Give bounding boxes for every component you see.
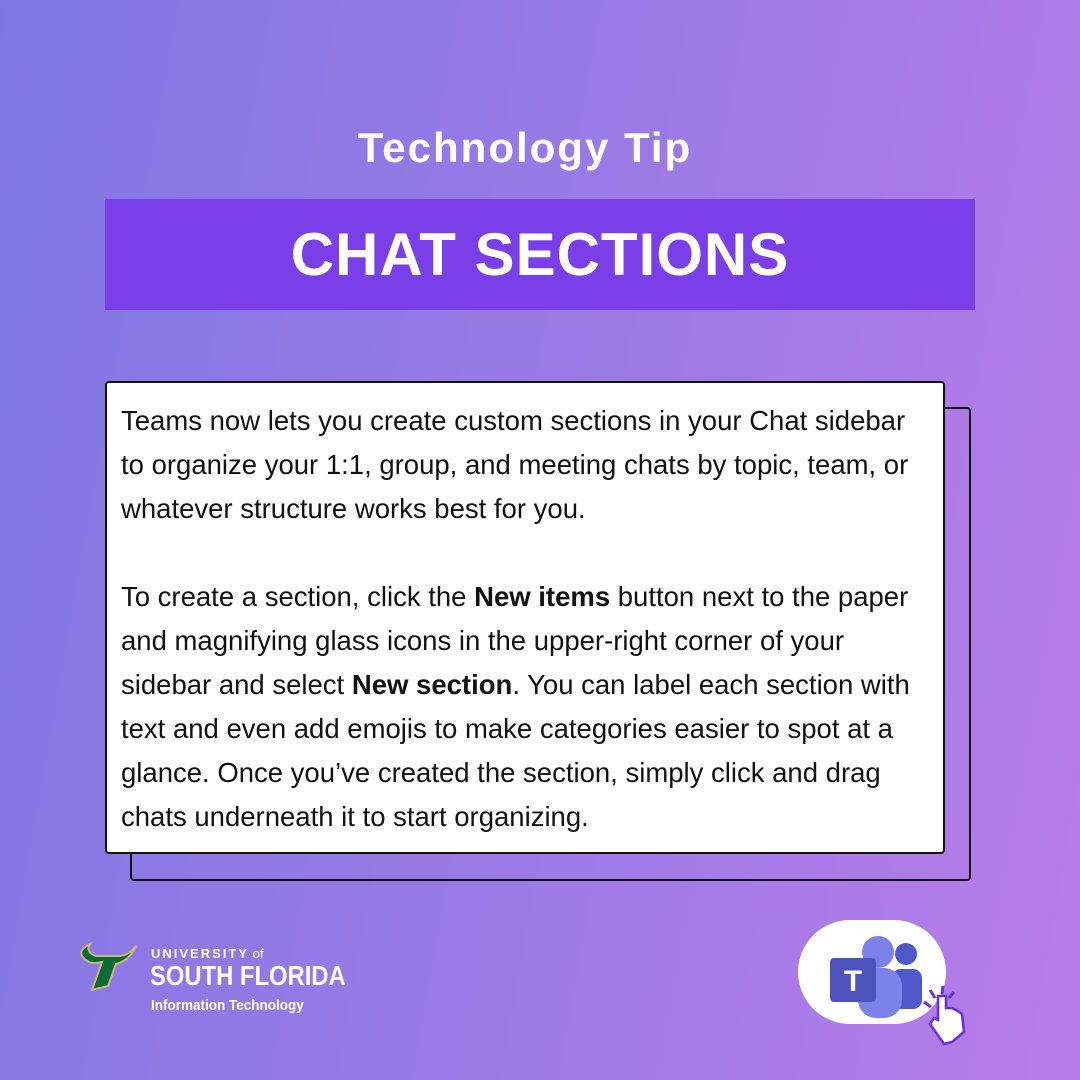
logo text: UNIVERSITY of: [151, 946, 263, 961]
logo: USF: SOUTH FLORIDA: [150, 960, 346, 991]
icon: Teams logo with cursor: T: [844, 965, 862, 998]
icon: Teams logo with cursor: [798, 920, 966, 1046]
text panel: [105, 381, 945, 854]
shadow box: [130, 407, 971, 881]
title: Technology Tip: Technology Tip: [358, 124, 692, 171]
paragraph 2: To create a section, click the New items button next to the paper and magnifying glass icons in the upper-right corner of your sidebar and select New section. You can label each section with text and even add emojis to make categories easier to spot at a glance. Once you’ve created the section, simply click and drag chats underneath it to start organizing.: [121, 581, 910, 832]
icon: bull horns: [80, 942, 137, 992]
paragraph 1: Teams now lets you create custom sections in your Chat sidebar to organize your 1:1, group, and meeting chats by topic, team, or whatever structure works best for you.: [121, 405, 908, 524]
heading band: [105, 199, 975, 310]
logo: USF: Information Technology: [151, 997, 304, 1014]
heading band: CHAT SECTIONS: [291, 221, 789, 288]
logo: USF: [80, 942, 346, 1014]
